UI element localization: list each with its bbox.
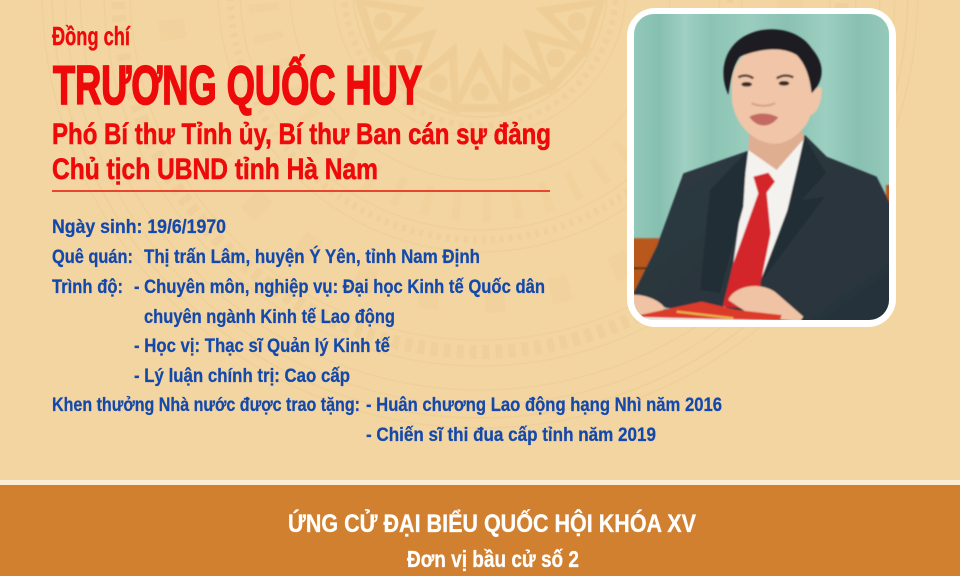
- position line 2: Chủ tịch UBND tỉnh Hà Nam: [52, 153, 378, 186]
- degree: - Học vị: Thạc sĩ Quản lý Kinh tế: [134, 336, 390, 357]
- heading: name: TRƯƠNG QUỐC HUY: [53, 54, 422, 116]
- awards label: Khen thưởng Nhà nước được trao tặng:: [52, 395, 360, 416]
- position line 1: Phó Bí thư Tỉnh ủy, Bí thư Ban cán sự đảng: [52, 118, 551, 151]
- award one: - Huân chương Lao động hạng Nhì năm 2016: [366, 395, 722, 416]
- banner subtitle: Đơn vị bầu cử số 2: [407, 546, 579, 572]
- light strip above banner: [0, 480, 960, 485]
- education label: Trình độ:: [52, 277, 123, 298]
- red divider: [52, 190, 550, 192]
- photo illustration: [630, 14, 895, 325]
- banner title: ỨNG CỬ ĐẠI BIỂU QUỐC HỘI KHÓA XV: [288, 508, 696, 538]
- award two: - Chiến sĩ thi đua cấp tỉnh năm 2019: [366, 425, 656, 446]
- birth date: Ngày sinh: 19/6/1970: [52, 217, 226, 238]
- heading: honorific: Đồng chí: [52, 21, 131, 51]
- hometown label: Quê quán:: [52, 247, 133, 268]
- hometown: Thị trấn Lâm, huyện Ý Yên, tỉnh Nam Định: [144, 246, 480, 268]
- education: - Chuyên môn, nghiệp vụ: Đại học Kinh tế Quốc dân: [134, 277, 545, 298]
- biography text block: [52, 217, 722, 446]
- political theory: - Lý luận chính trị: Cao cấp: [134, 366, 350, 387]
- banner background: [0, 485, 960, 576]
- education continued: chuyên ngành Kinh tế Lao động: [144, 307, 395, 328]
- white frame: [627, 8, 896, 327]
- bronze drum pattern: [42, 0, 918, 428]
- banner: [0, 485, 960, 576]
- portrait photo with white frame: [627, 8, 896, 327]
